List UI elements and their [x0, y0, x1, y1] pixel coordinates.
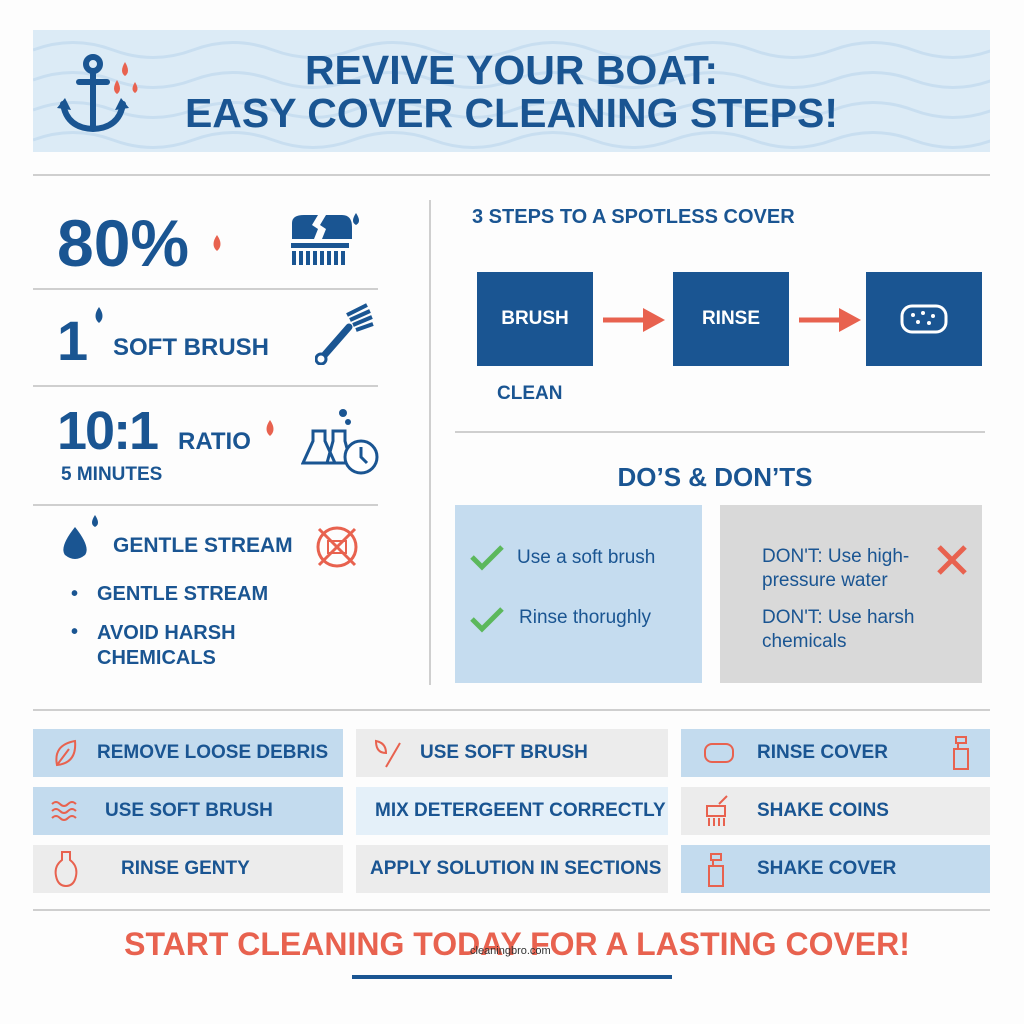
step sponge — [866, 272, 982, 366]
panel: donts: chemicals — [762, 631, 846, 652]
grid: tips: RINSE GENTY — [121, 858, 250, 879]
step brush — [477, 272, 593, 366]
step rinse — [673, 272, 789, 366]
panel: stats — [33, 206, 378, 669]
bullet list: • — [71, 621, 78, 643]
bullet list — [71, 583, 268, 669]
grid: tips: REMOVE LOOSE DEBRIS — [97, 742, 328, 763]
panel: donts: DON'T: Use high- — [762, 546, 909, 567]
icon: no chemicals — [316, 526, 358, 568]
stat 80%: 80% — [57, 206, 189, 280]
panel: stats: SOFT BRUSH — [113, 334, 269, 361]
title — [185, 47, 838, 136]
panel: 3 steps — [472, 206, 982, 404]
panel: stats: GENTLE STREAM — [113, 534, 293, 557]
grid: tips: MIX DETERGEENT CORRECTLY — [375, 800, 666, 821]
grid: tips: SHAKE COVER — [757, 858, 896, 879]
heading: 3 STEPS TO A SPOTLESS COVER — [472, 206, 795, 228]
watermark: cleaningbro.com — [470, 945, 551, 957]
footer call to action: START CLEANING TODAY FOR A LASTING COVER! — [124, 926, 910, 962]
bullet list: AVOID HARSH — [97, 622, 236, 644]
stat 1 soft brush: 1 — [57, 309, 88, 372]
arrow — [799, 308, 861, 332]
grid: tips: SHAKE COINS — [757, 800, 889, 821]
grid: tips: USE SOFT BRUSH — [420, 742, 588, 763]
grid: tips: APPLY SOLUTION IN SECTIONS — [370, 858, 661, 879]
icon: scrub brush — [291, 213, 359, 265]
grid: tips: USE SOFT BRUSH — [105, 800, 273, 821]
arrow — [603, 308, 665, 332]
grid: tips: RINSE COVER — [757, 742, 888, 763]
panel: donts — [720, 505, 982, 683]
icon: brush — [315, 303, 374, 365]
bullet list: CHEMICALS — [97, 647, 216, 669]
gentle stream header — [63, 515, 98, 559]
panel: stats: 5 MINUTES — [61, 464, 162, 485]
panel: donts: DON'T: Use harsh — [762, 607, 915, 628]
panel: stats: RATIO — [178, 428, 251, 455]
step rinse: RINSE — [702, 308, 760, 329]
step brush: BRUSH — [501, 308, 569, 329]
panel: dos: Use a soft brush — [517, 547, 655, 568]
panel: dos: Rinse thorughly — [519, 607, 651, 628]
header banner — [33, 30, 990, 152]
icon: anchor — [57, 54, 138, 132]
panel: donts: pressure water — [762, 570, 888, 591]
label clean: CLEAN — [497, 383, 562, 404]
title: EASY COVER CLEANING STEPS! — [185, 90, 838, 136]
bullet list: • — [71, 583, 78, 605]
heading: dos and donts: DO’S & DON’TS — [617, 462, 812, 492]
panel: dos — [455, 505, 702, 683]
title: REVIVE YOUR BOAT: — [305, 47, 718, 93]
stat ratio: 10:1 — [57, 401, 157, 461]
bullet list: GENTLE STREAM — [97, 583, 268, 605]
icon: flasks and clock — [301, 409, 378, 474]
